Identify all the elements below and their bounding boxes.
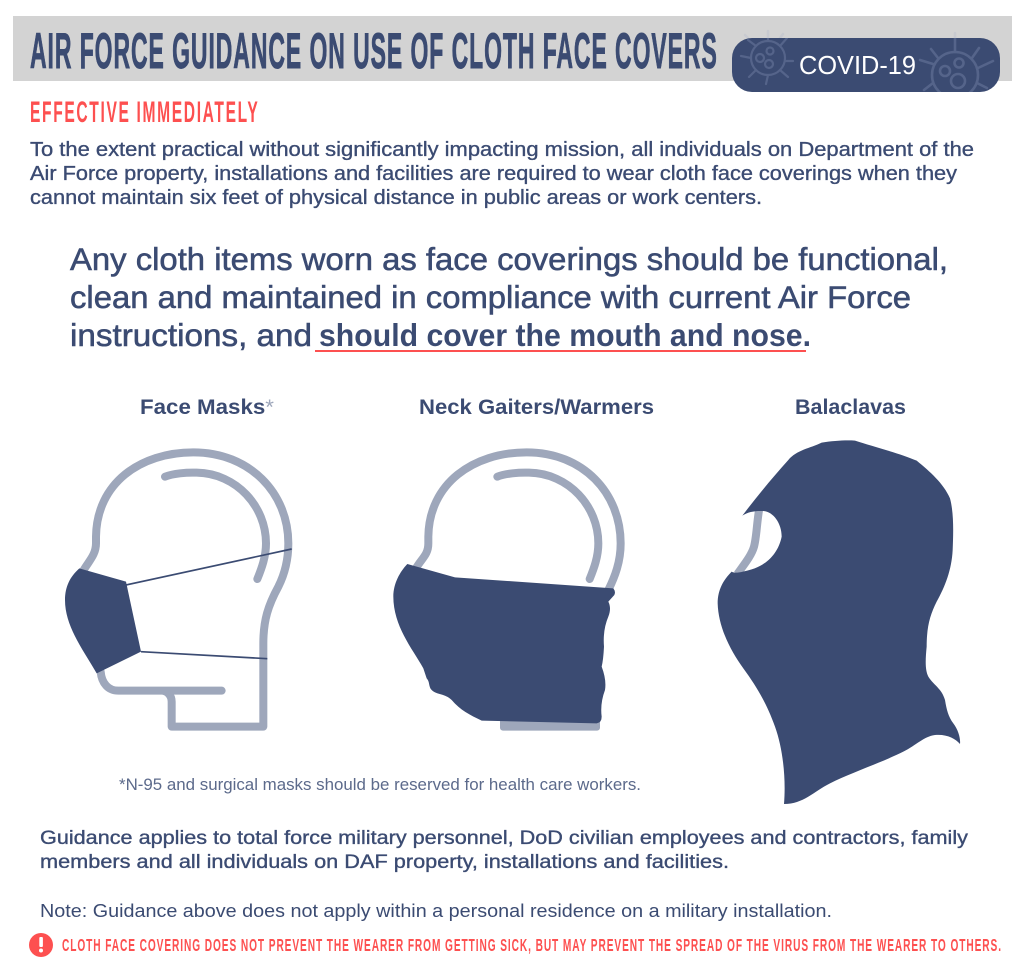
title: AIR FORCE GUIDANCE ON USE OF CLOTH FACE COVERS (30, 24, 717, 80)
applicability paragraph (40, 827, 968, 873)
warning (29, 933, 1001, 957)
faint virus spikes over band (745, 31, 955, 38)
subheading: effective immediately: EFFECTIVE IMMEDIATELY (30, 96, 258, 130)
icon: exclamation (29, 933, 53, 957)
applicability paragraph: Guidance applies to total force military personnel, DoD civilian employees and contractors, family (40, 827, 968, 849)
footnote: *N-95 and surgical masks should be reserved for health care workers. (119, 776, 641, 794)
key statement: clean and maintained in compliance with current Air Force (70, 279, 911, 315)
warning text: CLOTH FACE COVERING DOES NOT PREVENT THE WEARER FROM GETTING SICK, BUT MAY PREVENT THE SPREAD OF THE VIRUS FROM THE WEARER TO OTHERS. (62, 936, 1001, 956)
key statement: instructions, and (70, 317, 312, 353)
intro paragraph (30, 139, 974, 209)
key statement (70, 241, 948, 353)
key statement: Any cloth items worn as face coverings should be functional, (70, 241, 948, 277)
note: Note: Guidance above does not apply within a personal residence on a military installation. (40, 900, 832, 921)
label: face masks: Face Masks * (140, 396, 274, 419)
badge: COVID-19 (732, 38, 1000, 92)
applicability paragraph: members and all individuals on DAF property, installations and facilities. (40, 851, 729, 873)
icon: small virus (741, 31, 793, 84)
key statement: should cover the mouth and nose. (319, 317, 811, 353)
illustration: neck gaiter on head (393, 452, 621, 731)
illustration: balaclava (718, 440, 960, 804)
icon: large virus (920, 38, 993, 98)
intro paragraph: cannot maintain six feet of physical distance in public areas or work centers. (30, 187, 762, 209)
label: balaclavas: Balaclavas (795, 396, 906, 419)
label: neck gaiters: Neck Gaiters/Warmers (419, 396, 654, 419)
intro paragraph: To the extent practical without significantly impacting mission, all individuals on Department of the (30, 139, 974, 161)
header band (13, 16, 1012, 81)
illustration: face mask on head (65, 452, 292, 727)
badge label: COVID-19 (799, 50, 916, 80)
intro paragraph: Air Force property, installations and facilities are required to wear cloth face coverings when they (30, 163, 957, 185)
